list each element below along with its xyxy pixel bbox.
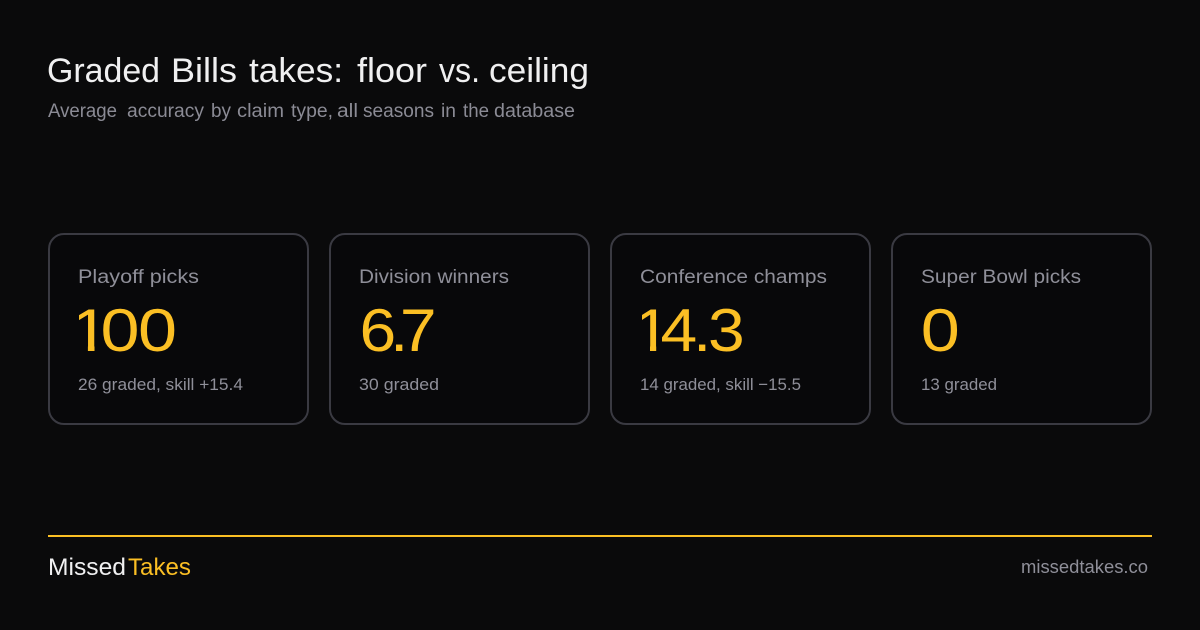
card label: division winners: Division winners — [359, 267, 509, 288]
subtitle: claim — [237, 101, 284, 122]
card value: 100: 100 — [70, 297, 177, 364]
card label: conference champs: Conference champs — [640, 267, 827, 288]
title: Graded — [47, 52, 160, 90]
brand logo: Takes — [128, 554, 191, 581]
card note: playoff picks: 26 graded, skill +15.4 — [78, 375, 243, 394]
title: takes: — [249, 52, 343, 90]
title: Bills — [171, 52, 237, 90]
title: vs. — [439, 52, 480, 90]
brand logo — [48, 554, 191, 581]
card value: 0: 0 — [921, 297, 960, 364]
subtitle: accuracy — [127, 101, 205, 122]
subtitle: all — [337, 101, 358, 122]
card value: 6.7: 6.7 — [360, 298, 437, 364]
card note: division winners: 30 graded — [359, 375, 439, 394]
card note: super bowl picks: 13 graded — [921, 375, 997, 394]
panel: super bowl picks — [892, 234, 1151, 424]
card label: super bowl picks: Super Bowl picks — [921, 267, 1081, 288]
subtitle: type, — [291, 101, 333, 122]
panel: division winners — [330, 234, 589, 424]
subtitle: Average — [48, 101, 117, 122]
card label: playoff picks: Playoff picks — [78, 267, 199, 288]
card note: conference champs: 14 graded, skill −15.5 — [640, 375, 801, 394]
website url: missedtakes.co — [1021, 557, 1148, 577]
subtitle: in — [441, 101, 456, 122]
title: floor — [357, 52, 427, 90]
panel: conference champs — [611, 234, 870, 424]
subtitle: by — [211, 101, 231, 122]
brand logo: Missed — [48, 554, 126, 581]
subtitle: the — [463, 101, 489, 122]
subtitle: seasons — [363, 101, 434, 122]
panel: playoff picks — [49, 234, 308, 424]
footer accent line — [48, 535, 1152, 537]
subtitle: database — [494, 101, 575, 122]
card value: 14.3: 14.3 — [634, 298, 745, 364]
title: ceiling — [489, 52, 589, 90]
